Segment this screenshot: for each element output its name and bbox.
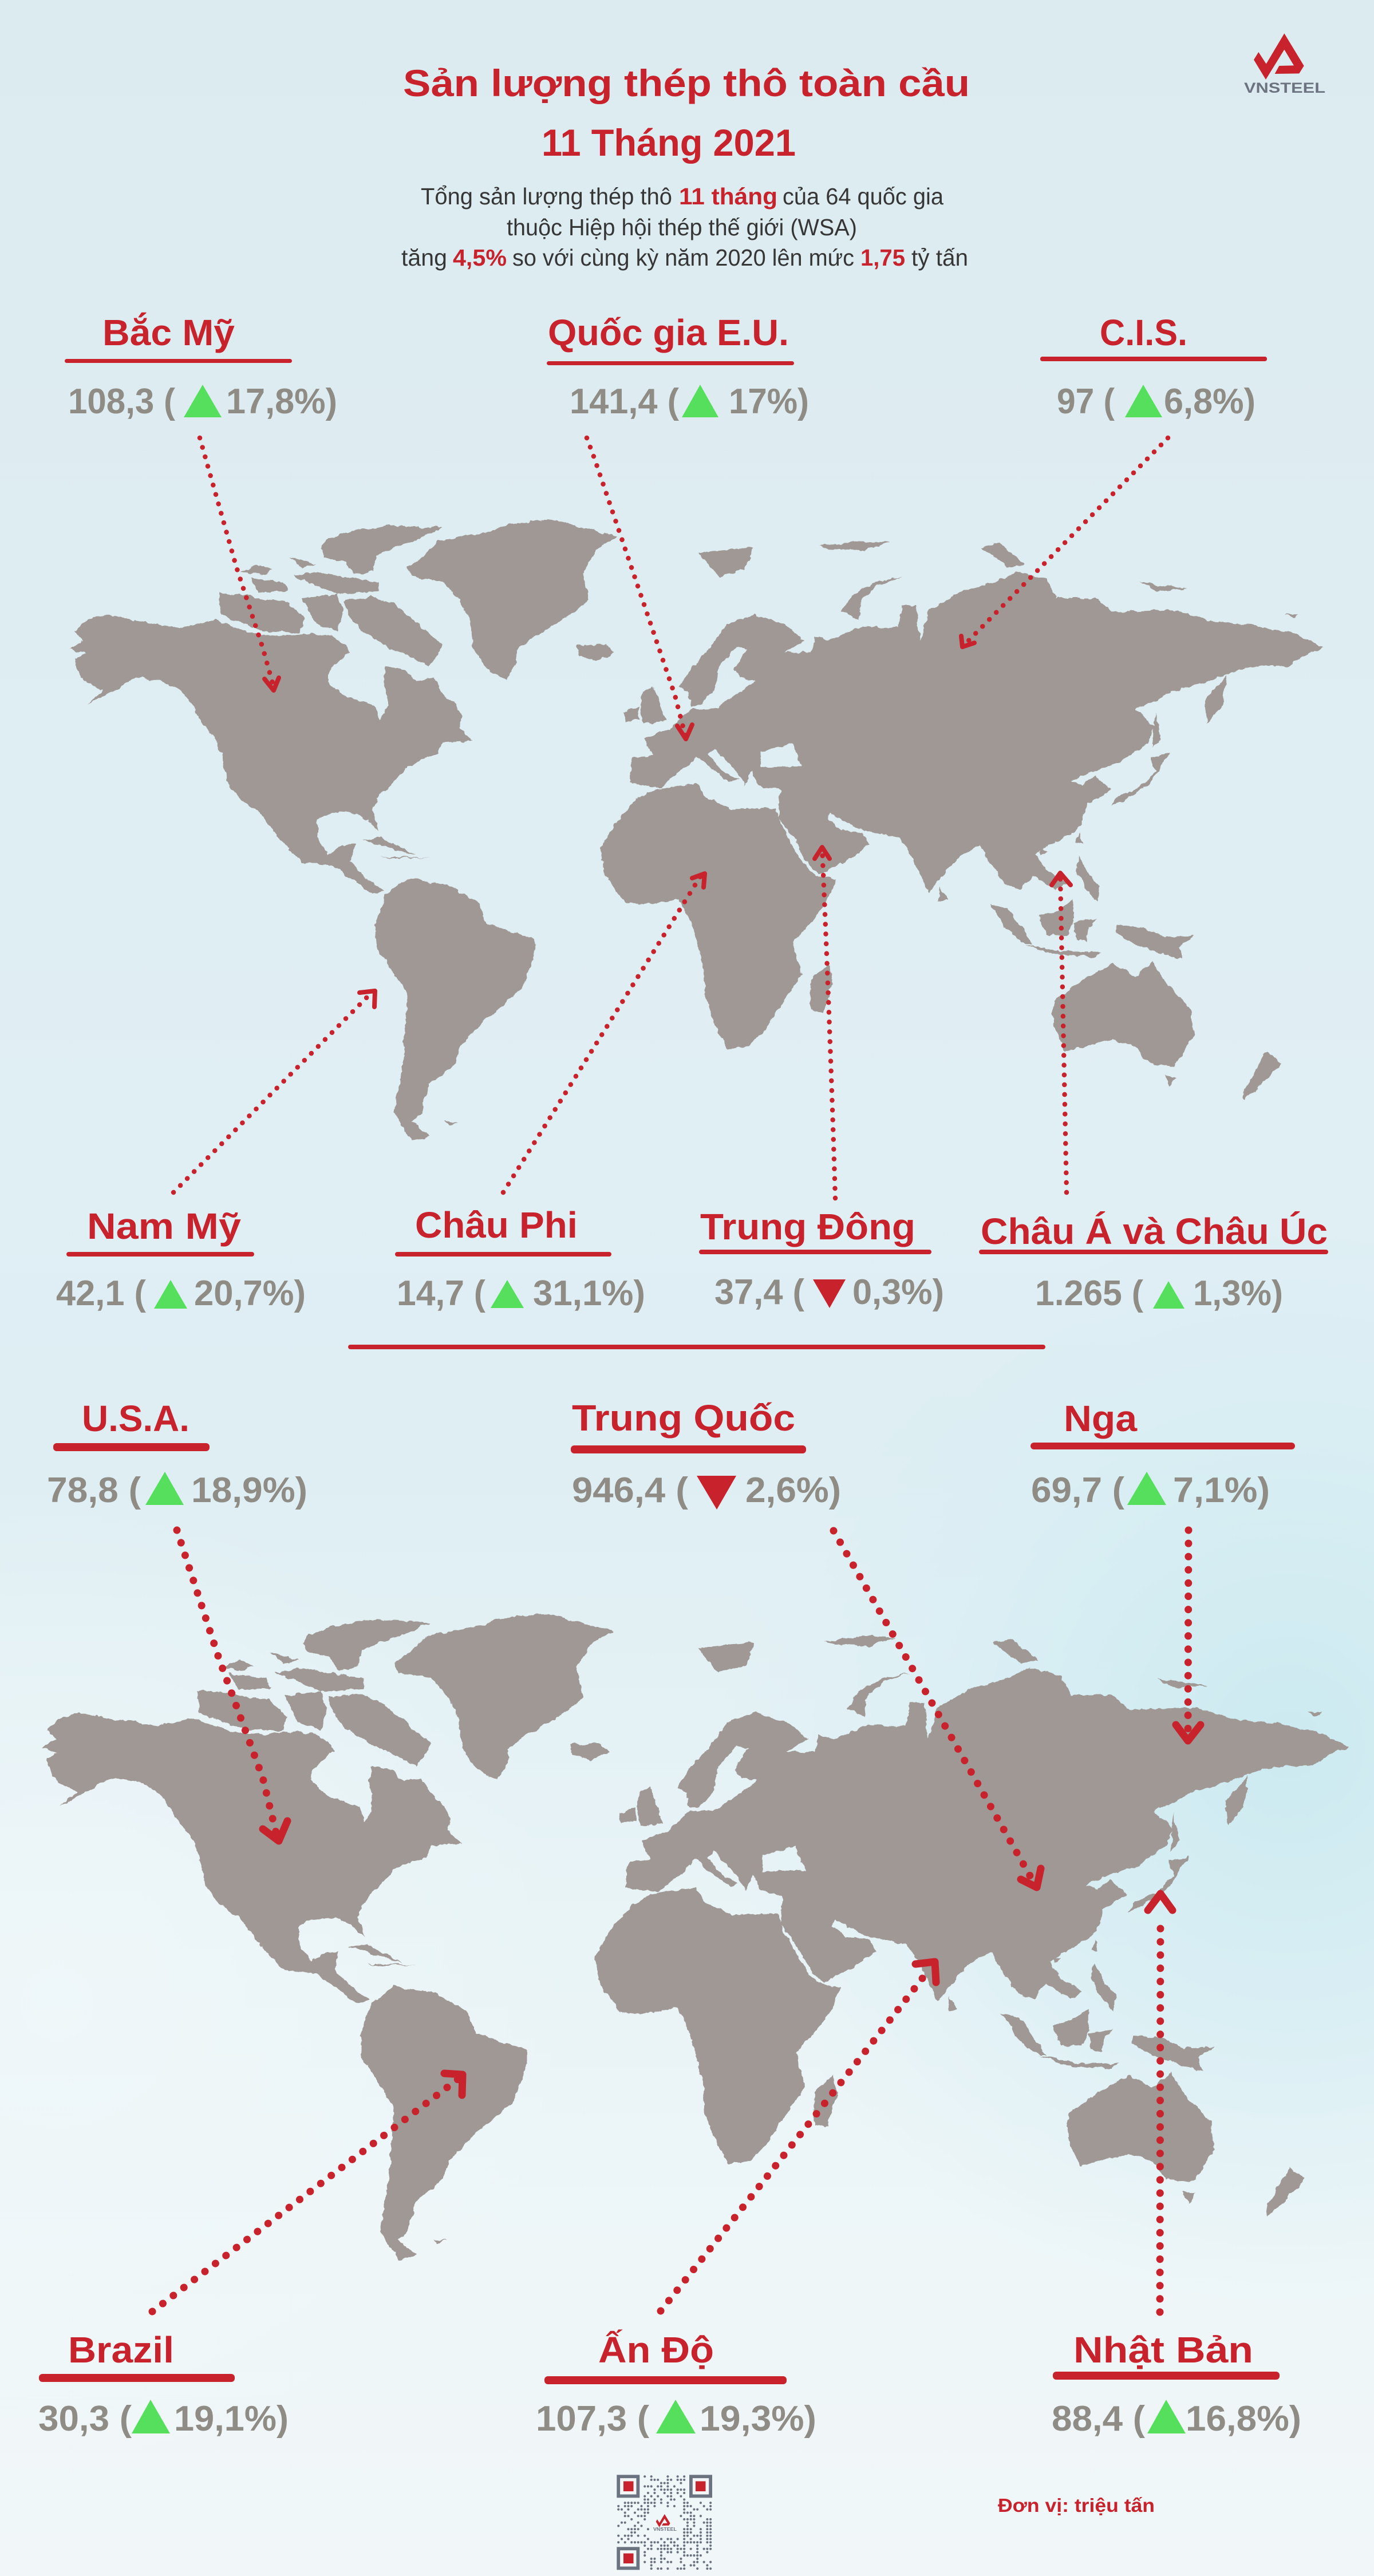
intro text block: tăng (401, 244, 447, 271)
section divider (348, 1345, 1045, 1349)
panel: Nhật Bản: 16,8%) (1186, 2399, 1301, 2439)
panel: Brazil: Brazil (68, 2329, 174, 2370)
panel: Quốc gia E.U.: Quốc gia E.U. (548, 312, 789, 353)
panel: Châu Phi: 14,7 ( (397, 1274, 485, 1313)
panel: Trung Quốc (571, 1397, 841, 1510)
panel: Châu Phi (395, 1204, 645, 1313)
panel: Quốc gia E.U.: 17%) (729, 382, 809, 421)
panel: Bắc Mỹ (65, 312, 337, 421)
arrow: Trung Đông to Middle East (815, 847, 835, 1198)
arrow: U.S.A. to United States (177, 1530, 287, 1841)
panel: Nga: 69,7 ( (1031, 1471, 1124, 1510)
arrow: Nam Mỹ to South America (173, 991, 375, 1192)
panel: Nam Mỹ: 42,1 ( (56, 1274, 146, 1313)
panel: Trung Đông: 37,4 ( (714, 1273, 804, 1312)
panel: Nga (1030, 1398, 1295, 1510)
panel: Nga: Nga (1064, 1398, 1137, 1439)
panel: Trung Đông: Trung Đông (700, 1206, 915, 1247)
panel: Nhật Bản (1052, 2329, 1301, 2439)
panel: Brazil (38, 2329, 289, 2439)
panel: U.S.A.: 78,8 ( (47, 1471, 141, 1510)
panel: Bắc Mỹ: 17,8%) (226, 382, 337, 421)
panel: Trung Quốc: 2,6%) (745, 1471, 841, 1510)
intro text block: tỷ tấn (911, 244, 968, 271)
panel: Châu Á và Châu Úc: Châu Á và Châu Úc (981, 1211, 1328, 1252)
arrow: Châu Á và Châu Úc to Asia (1052, 873, 1071, 1192)
title: Sản lượng thép thô toàn cầu (403, 62, 970, 104)
panel: Châu Phi: Châu Phi (415, 1204, 578, 1246)
intro text block: thuộc Hiệp hội thép thế giới (WSA) (507, 214, 857, 240)
panel: Brazil: 19,1%) (174, 2399, 289, 2439)
panel: Nhật Bản: Nhật Bản (1073, 2329, 1253, 2370)
panel: Quốc gia E.U.: 141,4 ( (570, 382, 679, 421)
panel: C.I.S. (1040, 312, 1267, 421)
arrow: E.U. to Europe (587, 438, 692, 739)
panel: Nhật Bản: 88,4 ( (1052, 2399, 1145, 2439)
panel: Châu Á và Châu Úc: 1.265 ( (1035, 1274, 1143, 1313)
panel: C.I.S.: 97 ( (1057, 382, 1115, 421)
intro text block: 11 tháng (679, 183, 777, 210)
arrow: Nhật Bản to Japan (1148, 1894, 1172, 2312)
panel: Ấn Độ: 19,3%) (700, 2399, 816, 2439)
logo: VNSTEEL (1244, 33, 1325, 96)
arrow: Trung Quốc to China (834, 1531, 1041, 1887)
panel: Bắc Mỹ: Bắc Mỹ (102, 312, 235, 353)
panel: U.S.A. (47, 1398, 307, 1510)
panel: Châu Á và Châu Úc: 1,3%) (1193, 1274, 1283, 1313)
panel: Ấn Độ (536, 2329, 816, 2439)
intro text block: so với cùng kỳ năm 2020 lên mức (512, 244, 854, 271)
subtitle: 11 Tháng 2021 (542, 121, 796, 164)
QR code (618, 2476, 710, 2569)
arrow: Châu Phi to Africa (503, 874, 705, 1192)
panel: Trung Đông (699, 1206, 944, 1312)
QR code: VNSTEEL (653, 2527, 677, 2532)
intro text block (401, 183, 968, 271)
arrow: Bắc Mỹ to North America (200, 438, 279, 690)
panel: C.I.S.: C.I.S. (1100, 312, 1187, 353)
panel: Ấn Độ: 107,3 ( (536, 2399, 649, 2439)
panel: Nam Mỹ (56, 1206, 306, 1313)
panel: Nam Mỹ: Nam Mỹ (87, 1206, 241, 1247)
intro text block: 4,5% (453, 244, 507, 271)
intro text block: Tổng sản lượng thép thô (421, 183, 672, 210)
panel: Châu Phi: 31,1%) (533, 1274, 645, 1313)
panel: Brazil: 30,3 ( (38, 2399, 132, 2439)
panel: Trung Quốc: Trung Quốc (572, 1397, 795, 1439)
panel: Trung Đông: 0,3%) (852, 1273, 944, 1312)
intro text block: 1,75 (860, 244, 905, 271)
panel: U.S.A.: 18,9%) (191, 1471, 307, 1510)
world map 2 (42, 1614, 1349, 2260)
panel: Nga: 7,1%) (1173, 1471, 1270, 1510)
arrow: C.I.S. to Russia (961, 438, 1168, 647)
logo: VNSTEEL: VNSTEEL (1244, 80, 1325, 96)
panel: U.S.A.: U.S.A. (82, 1398, 189, 1439)
panel: Bắc Mỹ: 108,3 ( (68, 382, 175, 421)
panel: Quốc gia E.U. (547, 312, 809, 421)
unit note: Đơn vị: triệu tấn (998, 2495, 1155, 2516)
world map 1 (70, 520, 1323, 1141)
panel: Nam Mỹ: 20,7%) (194, 1274, 306, 1313)
panel: Châu Á và Châu Úc (979, 1211, 1328, 1313)
panel: Ấn Độ: Ấn Độ (598, 2329, 714, 2370)
arrow: Nga to Russia (1176, 1530, 1201, 1741)
arrow: Brazil to Brazil (152, 2073, 463, 2312)
panel: Trung Quốc: 946,4 ( (572, 1471, 688, 1510)
intro text block: của 64 quốc gia (783, 183, 943, 210)
panel: C.I.S.: 6,8%) (1164, 382, 1255, 421)
arrow: Ấn Độ to India (661, 1962, 936, 2311)
